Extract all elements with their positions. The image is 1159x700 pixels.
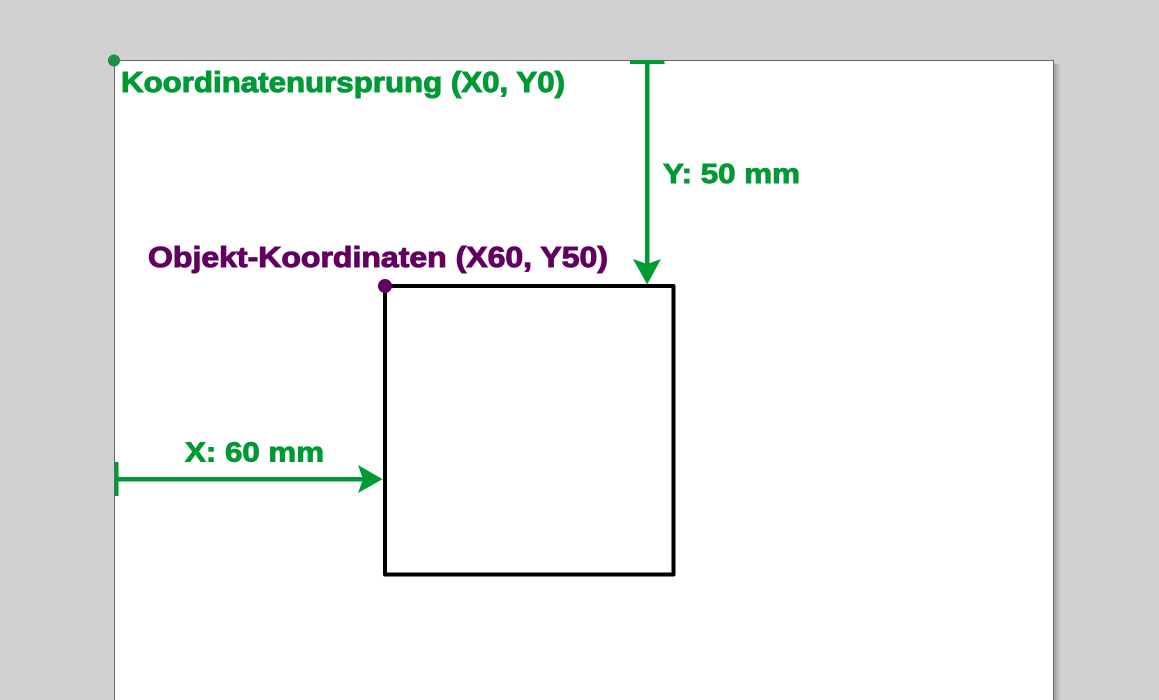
object marker dot (378, 279, 392, 293)
page sheet (114, 60, 1054, 700)
object coordinates label: Objekt-Koordinaten (X60, Y50) (148, 242, 608, 274)
Y distance label: Y: 50 mm (663, 158, 800, 189)
origin marker dot (108, 54, 120, 66)
page shadow (1054, 64, 1061, 700)
origin label: Koordinatenursprung (X0, Y0) (121, 67, 565, 99)
arrow: Y distance (630, 60, 664, 284)
arrow: X distance (115, 462, 382, 496)
X distance label: X: 60 mm (185, 436, 324, 468)
object square (385, 286, 674, 574)
